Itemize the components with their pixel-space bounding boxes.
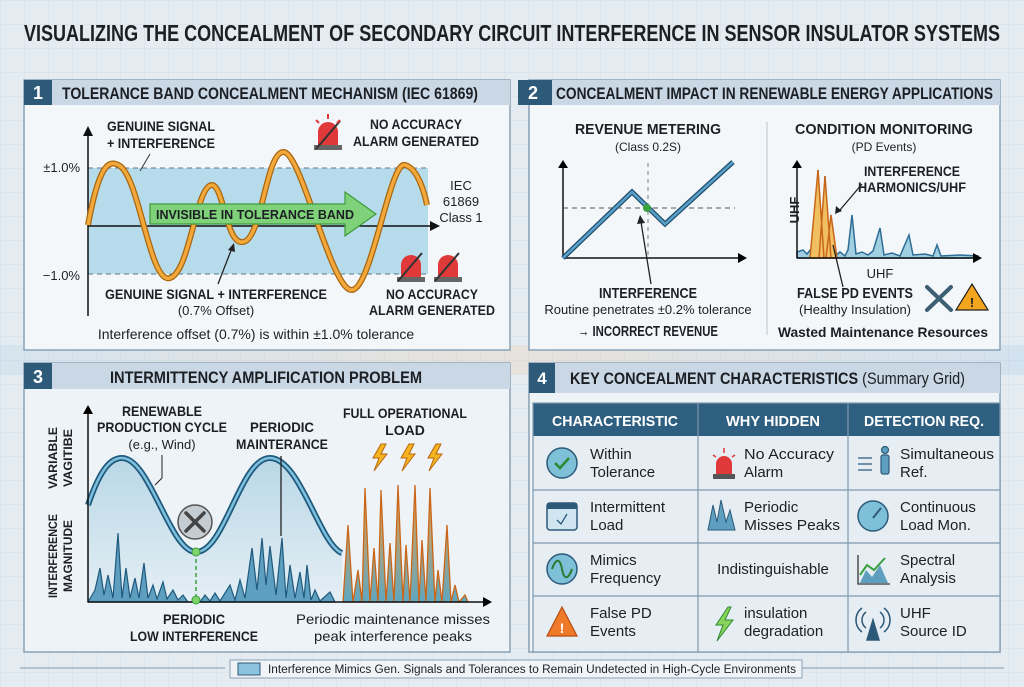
icon: alarm top bbox=[314, 114, 342, 150]
sub-panel: revenue metering: Routine penetrates ±0.2% tolerance bbox=[544, 302, 752, 317]
sub-panel: revenue metering: INTERFERENCE bbox=[599, 285, 697, 302]
footer legend: Interference Mimics Gen. Signals and Tolerances to Remain Undetected in High-Cycle Environments bbox=[268, 664, 796, 676]
row 1 bbox=[547, 446, 994, 481]
icon: wrench and warning: ! bbox=[970, 295, 974, 310]
row 2 bbox=[547, 499, 976, 534]
row 4: False PD bbox=[590, 605, 652, 622]
intermittency chart bbox=[83, 405, 492, 607]
sub-panel: condition monitoring: HARMONICS/UHF bbox=[858, 179, 966, 195]
row 2: Misses Peaks bbox=[744, 517, 840, 534]
label: periodic low interference: LOW INTERFERENCE bbox=[130, 628, 258, 644]
sub-panel: condition monitoring: (PD Events) bbox=[852, 140, 916, 154]
summary table: WHY HIDDEN bbox=[726, 413, 820, 430]
panel 2: renewable applications: 2 bbox=[528, 83, 538, 103]
label: IEC class: IEC bbox=[450, 178, 472, 193]
panel 2: renewable applications bbox=[518, 80, 1000, 350]
label: periodic low interference bbox=[130, 611, 258, 644]
sub-panel: revenue metering: → INCORRECT REVENUE bbox=[578, 323, 718, 340]
panel 4 heading: KEY CONCEALMENT CHARACTERISTICS (Summary Grid) bbox=[570, 369, 965, 388]
arrow: invisible in tolerance band: INVISIBLE IN TOLERANCE BAND bbox=[156, 207, 354, 222]
panel 3: intermittency bbox=[24, 363, 510, 652]
label: no alarm top: ALARM GENERATED bbox=[353, 133, 479, 149]
label: genuine signal offset bbox=[105, 243, 327, 318]
sub-panel: condition monitoring: (Healthy Insulation) bbox=[799, 302, 911, 317]
label: periodic low interference: PERIODIC bbox=[163, 611, 225, 627]
icon: maintenance wrench circle bbox=[178, 505, 212, 539]
tolerance band chart: −1.0% bbox=[43, 268, 80, 283]
arrow: invisible in tolerance band bbox=[150, 192, 376, 236]
sub-panel: condition monitoring bbox=[778, 121, 988, 340]
row 3: Frequency bbox=[590, 570, 661, 587]
panel 3 heading: INTERMITTENCY AMPLIFICATION PROBLEM bbox=[110, 368, 422, 387]
label: renewable production cycle: RENEWABLE bbox=[122, 403, 202, 419]
row 2: Load bbox=[590, 517, 623, 534]
panel 1: tolerance band bbox=[24, 80, 510, 350]
icon: alarms bottom bbox=[397, 253, 462, 282]
row 2: Continuous bbox=[900, 499, 976, 516]
row 1: Tolerance bbox=[590, 464, 655, 481]
label: genuine signal offset: GENUINE SIGNAL + INTERFERENCE bbox=[105, 286, 327, 302]
label: no alarm top: NO ACCURACY bbox=[370, 116, 463, 132]
axis labels bbox=[46, 427, 75, 598]
row 4: Events bbox=[590, 623, 636, 640]
sub-panel: condition monitoring: INTERFERENCE bbox=[864, 163, 960, 179]
row 1: No Accuracy bbox=[744, 446, 835, 463]
axis labels: VAGITIBE bbox=[61, 429, 75, 487]
row 3: Analysis bbox=[900, 570, 956, 587]
row 1: Alarm bbox=[744, 464, 783, 481]
label: periodic maintenance: PERIODIC bbox=[250, 419, 314, 435]
icon: lightning bolts bbox=[373, 444, 442, 471]
label: periodic maintenance: MAINTERANCE bbox=[236, 436, 328, 452]
panel 1: tolerance band: 1 bbox=[33, 83, 43, 103]
row 4: ! bbox=[560, 620, 564, 636]
label: no alarm bottom: ALARM GENERATED bbox=[369, 302, 495, 318]
caption panel 3 bbox=[296, 611, 490, 644]
sub-panel: condition monitoring: UHF bbox=[867, 266, 893, 281]
row 3 bbox=[547, 552, 956, 587]
sub-panel: condition monitoring: FALSE PD EVENTS bbox=[797, 285, 913, 302]
row 1: Ref. bbox=[900, 464, 928, 481]
axis labels: MAGNITUDE bbox=[61, 520, 75, 592]
summary table: DETECTION REQ. bbox=[864, 413, 984, 430]
sub-panel: revenue metering: REVENUE METERING bbox=[575, 121, 721, 138]
label: renewable production cycle: (e.g., Wind) bbox=[128, 437, 196, 452]
row 3: Mimics bbox=[590, 552, 637, 569]
sub-panel: condition monitoring: Wasted Maintenance Resources bbox=[778, 324, 988, 340]
row 4: degradation bbox=[744, 623, 823, 640]
label: IEC class: Class 1 bbox=[439, 210, 483, 225]
tolerance band chart bbox=[43, 126, 440, 316]
label: IEC class bbox=[439, 178, 483, 225]
row 2: Load Mon. bbox=[900, 517, 971, 534]
tolerance band chart: ±1.0% bbox=[43, 160, 80, 175]
panel 4: summary grid bbox=[529, 363, 1000, 652]
label: no alarm top bbox=[353, 116, 479, 149]
row 4 bbox=[547, 605, 967, 641]
label: renewable production cycle: PRODUCTION CYCLE bbox=[97, 419, 227, 435]
row 4: UHF bbox=[900, 605, 931, 622]
label: genuine signal offset: (0.7% Offset) bbox=[178, 303, 254, 318]
row 4: Source ID bbox=[900, 623, 967, 640]
sub-panel: revenue metering bbox=[544, 121, 752, 340]
row 2: Intermittent bbox=[590, 499, 666, 516]
label: genuine signal top: + INTERFERENCE bbox=[107, 135, 215, 151]
panel 4: summary grid: 4 bbox=[537, 369, 547, 388]
row 2: Periodic bbox=[744, 499, 799, 516]
label: no alarm bottom bbox=[369, 286, 495, 318]
label: no alarm bottom: NO ACCURACY bbox=[386, 286, 479, 302]
label: renewable production cycle bbox=[97, 403, 227, 485]
summary table bbox=[533, 403, 1000, 652]
summary table: CHARACTERISTIC bbox=[552, 413, 678, 430]
row 3: Spectral bbox=[900, 552, 955, 569]
panel 1 heading: TOLERANCE BAND CONCEALMENT MECHANISM (IEC 61869) bbox=[62, 84, 478, 103]
label: full operational load bbox=[343, 405, 467, 438]
legend swatch bbox=[238, 663, 260, 675]
axis labels: VARIABLE bbox=[46, 427, 60, 489]
caption panel 3: Periodic maintenance misses bbox=[296, 611, 490, 627]
row 3: Indistinguishable bbox=[717, 561, 829, 578]
label: full operational load: LOAD bbox=[385, 422, 425, 438]
label: periodic maintenance bbox=[236, 419, 328, 536]
footer legend bbox=[20, 660, 1004, 678]
label: IEC class: 61869 bbox=[443, 194, 479, 209]
row 1: Simultaneous bbox=[900, 446, 994, 463]
axis labels: INTERFERENCE bbox=[46, 514, 60, 598]
panel 3: intermittency: 3 bbox=[33, 367, 43, 387]
label: full operational load: FULL OPERATIONAL bbox=[343, 405, 467, 421]
icon: wrench and warning bbox=[927, 284, 988, 310]
row 4: insulation bbox=[744, 605, 807, 622]
row 1: Within bbox=[590, 446, 632, 463]
sub-panel: revenue metering: (Class 0.2S) bbox=[615, 140, 681, 154]
caption panel 1: Interference offset (0.7%) is within ±1.0% tolerance bbox=[98, 326, 414, 342]
label: genuine signal top: GENUINE SIGNAL bbox=[107, 118, 215, 134]
label: genuine signal top bbox=[107, 118, 215, 171]
sub-panel: condition monitoring: CONDITION MONITORING bbox=[795, 121, 973, 138]
caption panel 3: peak interference peaks bbox=[314, 628, 472, 644]
sub-panel: condition monitoring: UHF bbox=[787, 197, 802, 223]
